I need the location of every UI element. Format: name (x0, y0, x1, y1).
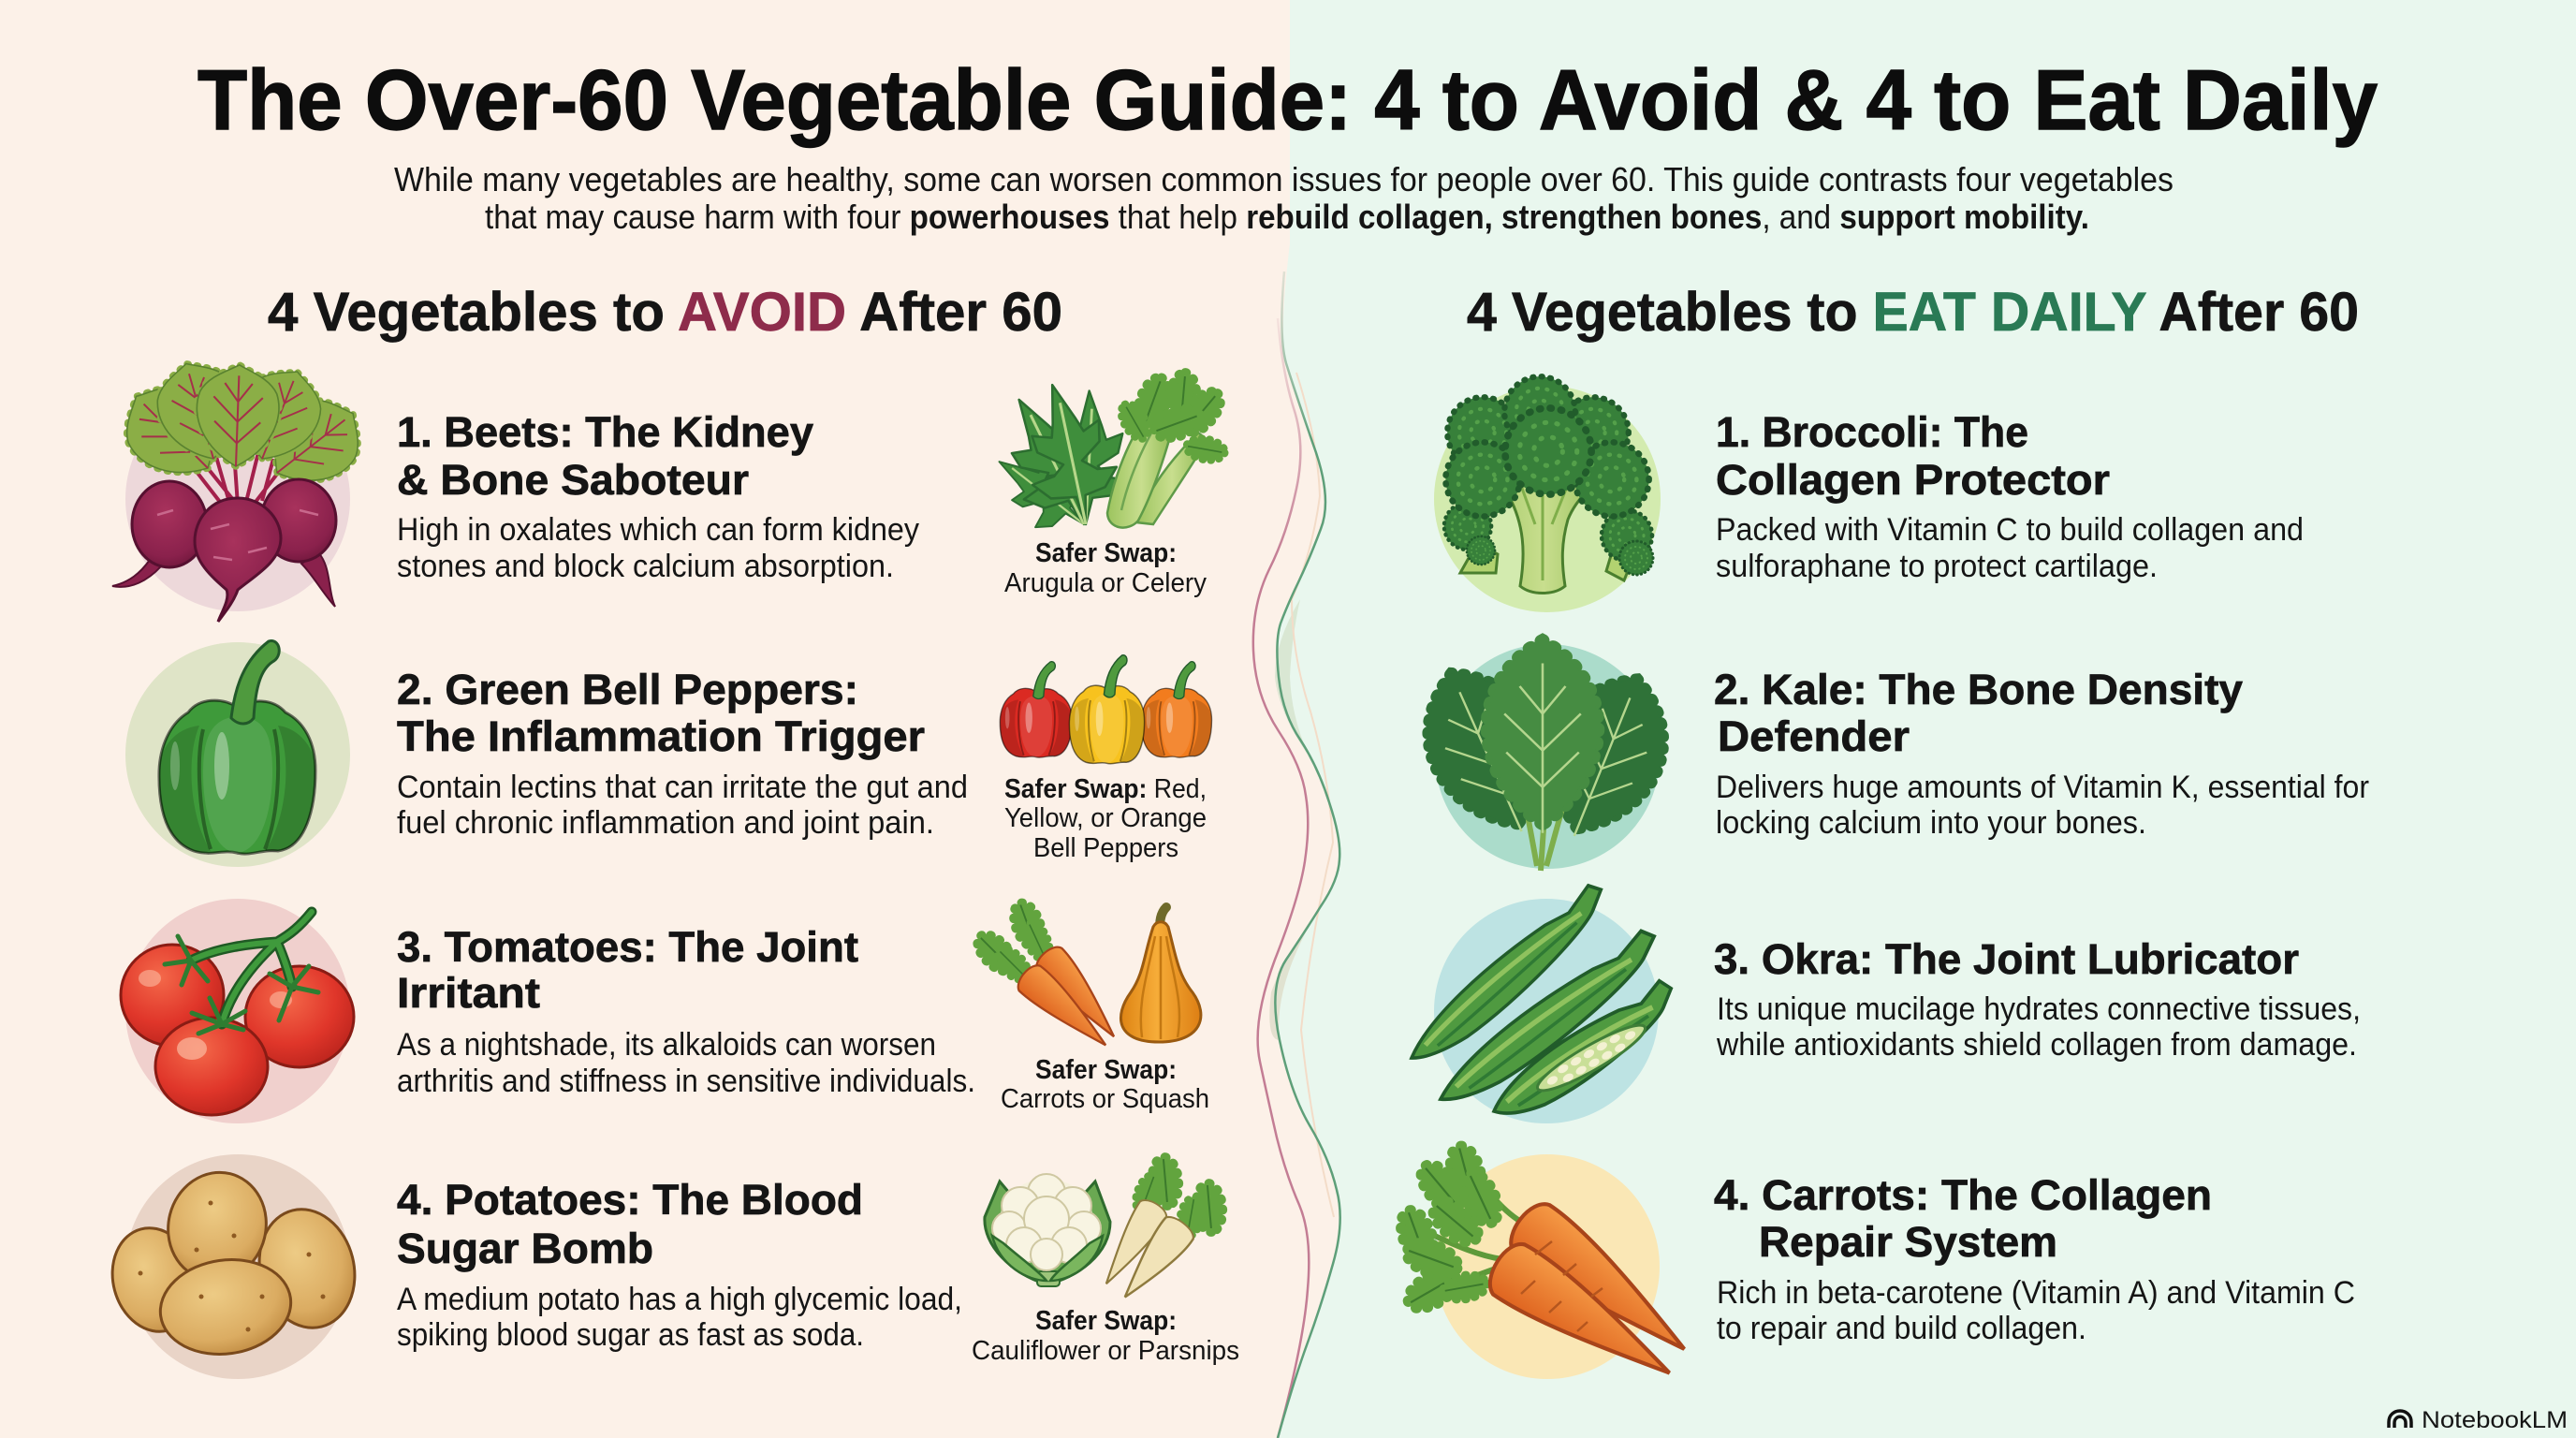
text: broccoli: Collagen Protector (1716, 456, 2110, 504)
text: tomatoes: Irritant (397, 969, 540, 1017)
icon: kale (1404, 640, 1686, 871)
text: broccoli (1716, 408, 2304, 584)
wavy divider (1253, 271, 1340, 1438)
icon: carrots (1395, 1142, 1704, 1397)
item: potatoes (101, 1154, 1239, 1379)
text: safer swap peppers: Yellow, or Orange (1004, 803, 1207, 833)
text: potatoes: A medium potato has a high glycemic load, (397, 1282, 962, 1317)
text: peppers: fuel chronic inflammation and joint pain. (397, 805, 934, 841)
icon: arugula and celery (981, 372, 1227, 550)
text: tomatoes: 3. Tomatoes: The Joint (397, 923, 858, 971)
text: safer swap carrots: Carrots or Squash (1001, 1084, 1209, 1114)
item: broccoli (1434, 376, 2304, 612)
text: okra (1714, 935, 2361, 1063)
text: carrots: Rich in beta-carotene (Vitamin A) and Vitamin C (1717, 1275, 2355, 1311)
text: beets: stones and block calcium absorption. (397, 549, 894, 584)
text: safer swap arugula (1004, 538, 1207, 598)
text: beets (397, 408, 919, 584)
text: safer swap cauliflower (972, 1306, 1239, 1366)
text: carrots: Repair System (1759, 1218, 2057, 1266)
item: green bell peppers (125, 640, 1211, 867)
text: potatoes: 4. Potatoes: The Blood (397, 1176, 863, 1224)
text: safer swap carrots: Safer Swap: (1035, 1055, 1177, 1085)
background: right side (1275, 0, 2576, 1438)
icon: tomatoes (121, 899, 354, 1123)
item: tomatoes (121, 899, 1209, 1123)
text: kale (1714, 666, 2369, 841)
text: safer swap arugula: Arugula or Celery (1004, 568, 1207, 598)
subtitle: While many vegetables are healthy, some can worsen common issues for people over 60. This guide contrasts four vegetables (394, 160, 2174, 198)
text: potatoes (397, 1176, 962, 1353)
heading: eat daily: 4 Vegetables to EAT DAILY After 60 (1467, 282, 2359, 343)
text: broccoli: sulforaphane to protect cartilage. (1716, 549, 2158, 584)
text: carrots: to repair and build collagen. (1717, 1311, 2086, 1346)
text: peppers: Contain lectins that can irritate the gut and (397, 770, 968, 805)
text: carrots: 4. Carrots: The Collagen (1714, 1171, 2212, 1219)
icon: carrots and squash (971, 899, 1201, 1057)
subtitle: that may cause harm with four powerhouses that help rebuild collagen, strengthen bones, and support mobility. (485, 198, 2089, 236)
icon: green pepper (125, 640, 350, 867)
text: broccoli: 1. Broccoli: The (1716, 408, 2028, 456)
title: The Over-60 Vegetable Guide: 4 to Avoid & 4 to Eat Daily (198, 53, 2378, 148)
text: peppers: The Inflammation Trigger (397, 712, 925, 760)
icon: okra (1395, 881, 1690, 1129)
logo: NotebookLM: NotebookLM (2422, 1407, 2568, 1433)
text: safer swap peppers (1004, 774, 1207, 863)
text: peppers: 2. Green Bell Peppers: (397, 666, 858, 713)
item: carrots (1395, 1142, 2355, 1397)
panel: vegetables to eat daily (1395, 282, 2369, 1397)
text: tomatoes (397, 923, 975, 1099)
text: safer swap arugula: Safer Swap: (1035, 538, 1177, 568)
text: peppers (397, 666, 968, 841)
panel: vegetables to avoid (101, 282, 1239, 1379)
text: safer swap cauliflower: Cauliflower or Parsnips (972, 1336, 1239, 1366)
text: tomatoes: arthritis and stiffness in sensitive individuals. (397, 1064, 975, 1099)
text: kale: 2. Kale: The Bone Density (1714, 666, 2243, 713)
item: okra (1395, 881, 2361, 1129)
icon: beets (107, 353, 377, 622)
icon: broccoli (1434, 376, 1661, 612)
heading: avoid: 4 Vegetables to AVOID After 60 (268, 282, 1062, 343)
text: beets: 1. Beets: The Kidney (397, 408, 813, 456)
text: beets: & Bone Saboteur (397, 456, 749, 504)
text: potatoes: spiking blood sugar as fast as soda. (397, 1317, 864, 1353)
text: kale: Delivers huge amounts of Vitamin K, essential for (1716, 770, 2369, 805)
subtitle (394, 160, 2174, 236)
text: broccoli: Packed with Vitamin C to build collagen and (1716, 512, 2304, 548)
text: okra: while antioxidants shield collagen from damage. (1716, 1027, 2357, 1063)
icon: red yellow orange peppers (1000, 655, 1211, 764)
text: beets: High in oxalates which can form kidney (397, 512, 919, 548)
text: safer swap cauliflower: Safer Swap: (1035, 1306, 1177, 1336)
text: carrots (1714, 1171, 2355, 1346)
text: safer swap carrots (1001, 1055, 1209, 1114)
text: kale: Defender (1718, 712, 1910, 760)
text: safer swap peppers: Safer Swap: Red, (1004, 774, 1207, 804)
icon: cauliflower and parsnips (985, 1156, 1224, 1309)
item: kale (1404, 640, 2369, 871)
item: beets (107, 353, 1227, 622)
text: okra: Its unique mucilage hydrates connective tissues, (1717, 991, 2361, 1027)
text: kale: locking calcium into your bones. (1716, 805, 2146, 841)
text: safer swap peppers: Bell Peppers (1033, 833, 1178, 863)
text: potatoes: Sugar Bomb (397, 1225, 653, 1272)
text: okra: 3. Okra: The Joint Lubricator (1714, 935, 2299, 983)
icon: potatoes (101, 1154, 367, 1379)
text: tomatoes: As a nightshade, its alkaloids can worsen (397, 1027, 936, 1063)
